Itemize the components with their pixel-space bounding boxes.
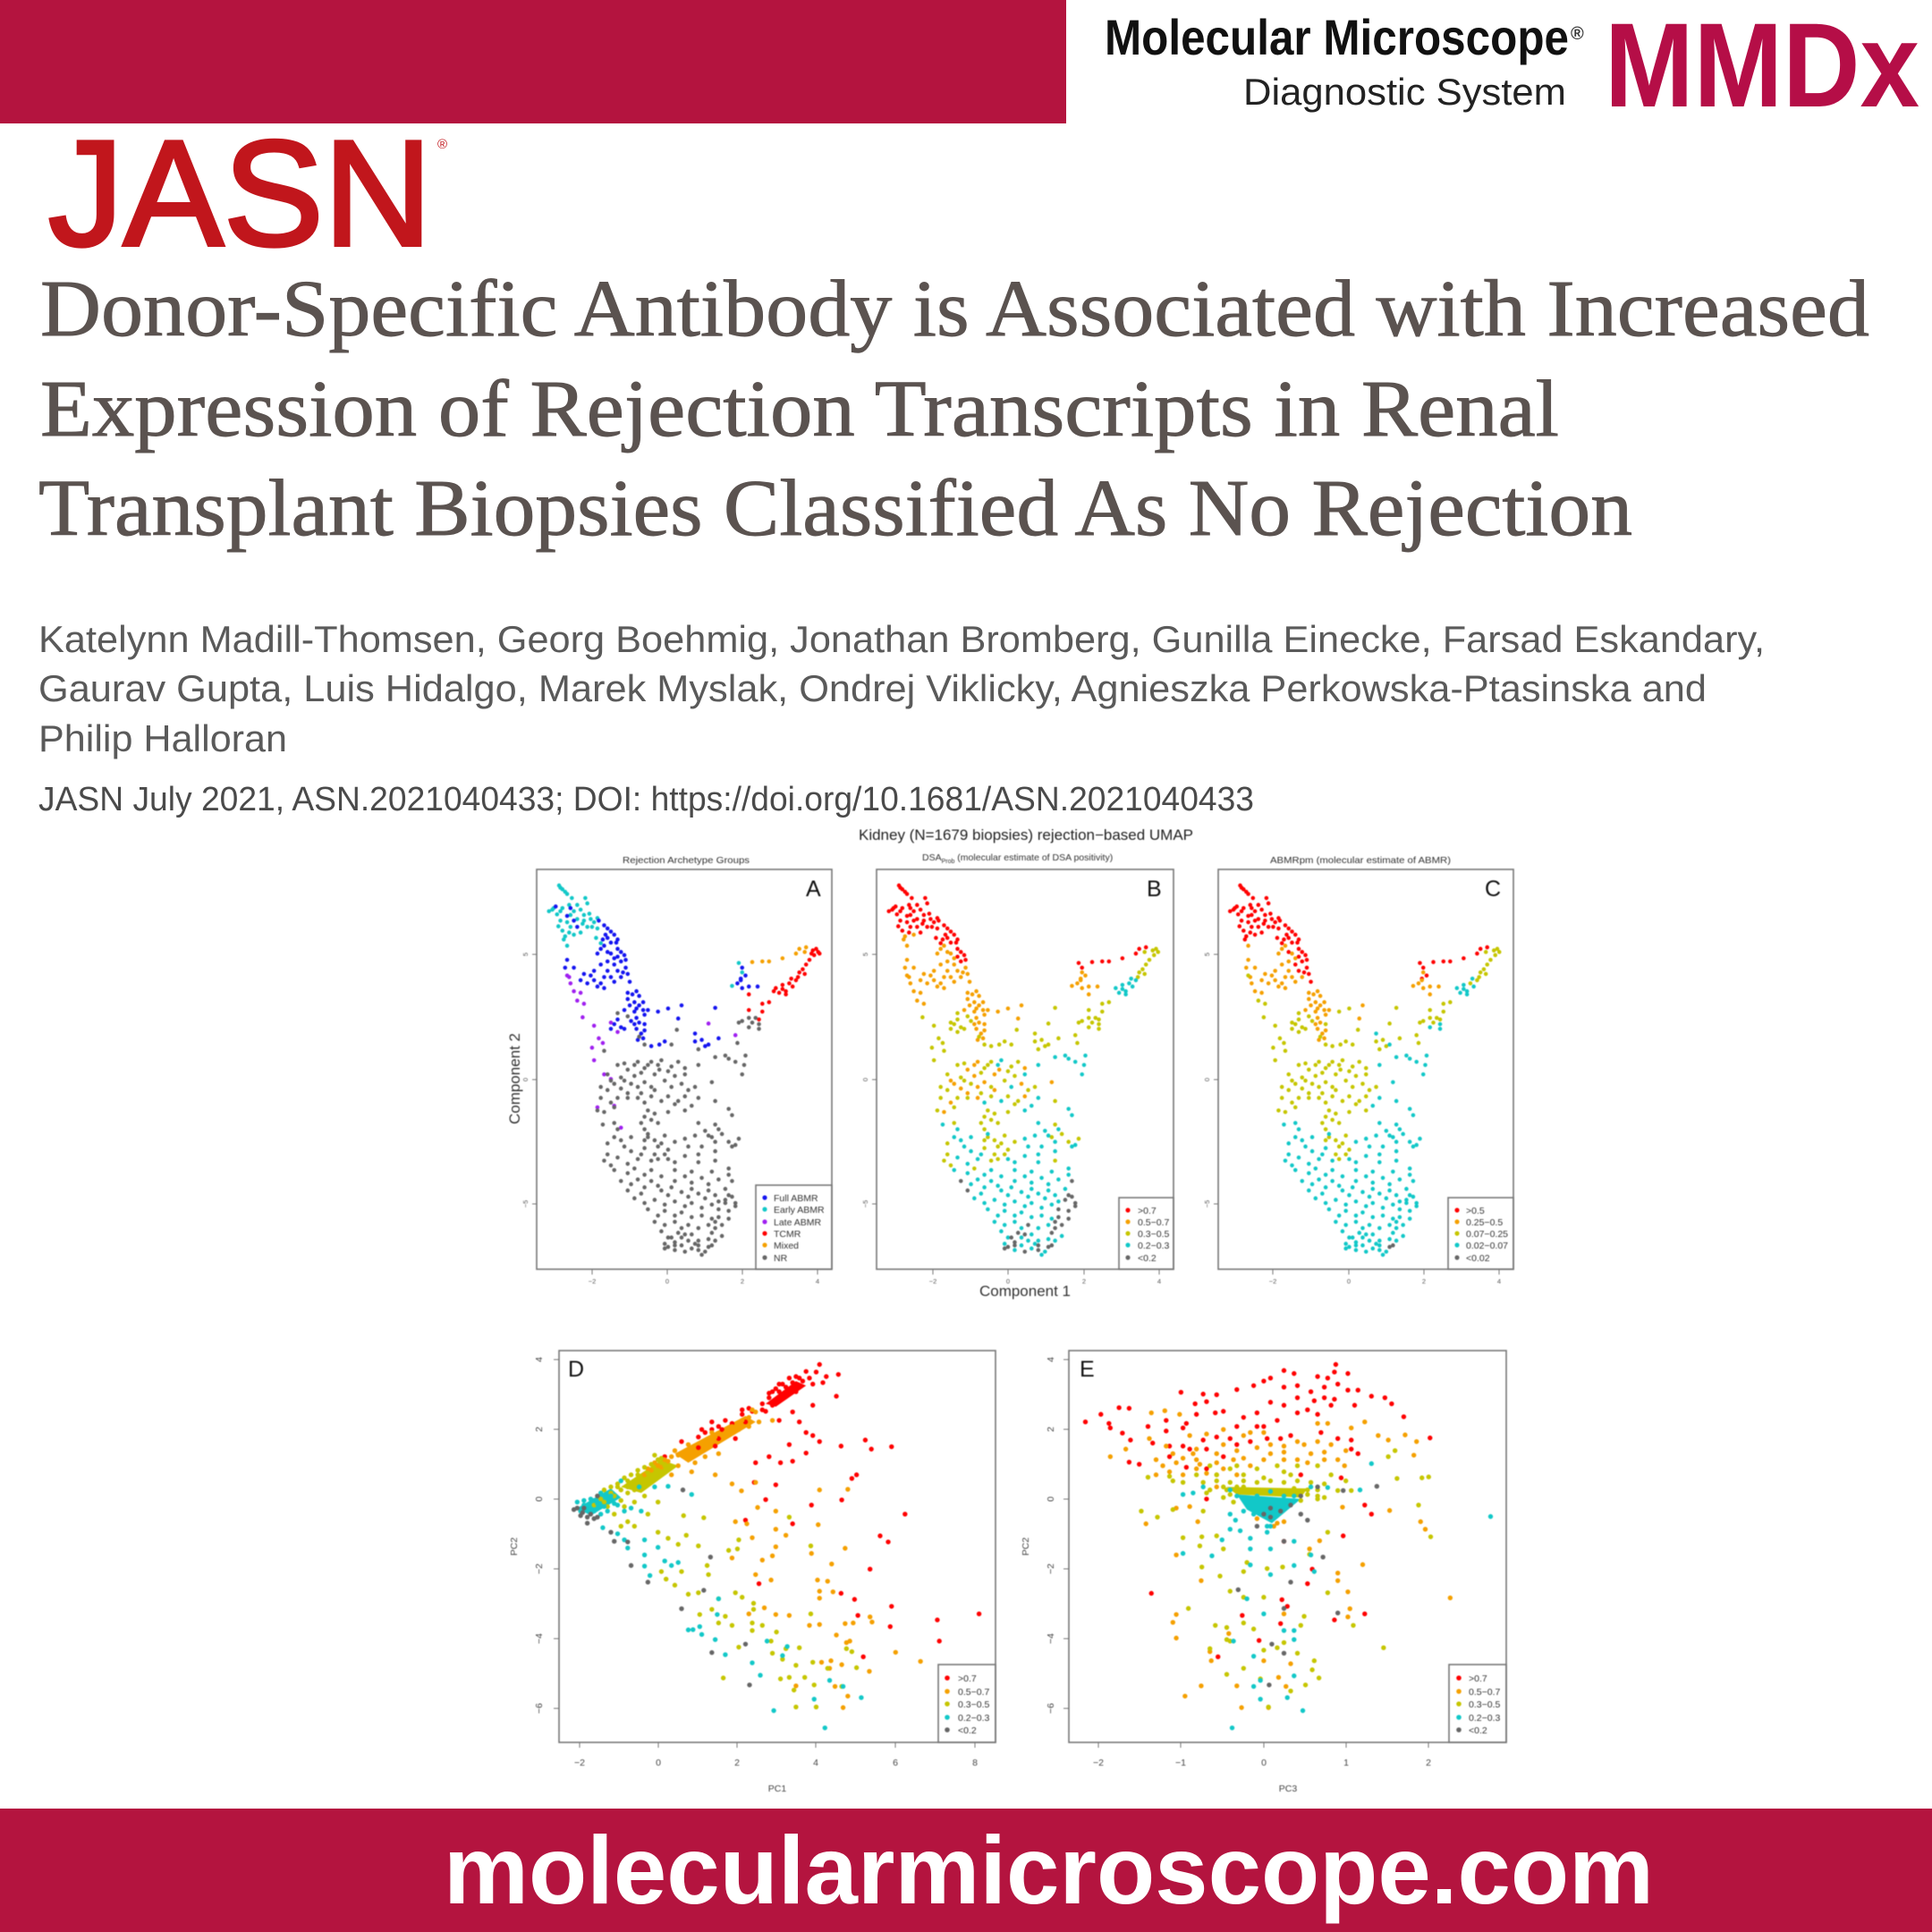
panel B: DSA prob: 4 [1157,1277,1161,1285]
panel A: rejection archetype groups: −5 [521,1200,530,1208]
panel E: PC3 vs PC2: 0 [1261,1758,1267,1768]
panel E: PC3 vs PC2: 1 [1343,1758,1349,1768]
panel D: PC1 vs PC2: 2 [534,1427,545,1432]
panel C heading: ABMRpm (molecular estimate of ABMR) [1270,855,1451,866]
panel A legend: TCMR [774,1229,801,1240]
logo: Molecular Microscope: Molecular Microscope [1105,9,1569,65]
panel E legend: <0.2 [1469,1725,1487,1736]
panel C: ABMRpm: 5 [1203,953,1211,956]
panel D: PC1 vs PC2 [509,1351,996,1794]
panel D letter: D [568,1357,584,1382]
website url: molecularmicroscope.com [444,1816,1654,1924]
panel A legend: NR [774,1253,788,1264]
title: Transplant Biopsies Classified As No Rejection [38,464,1632,553]
panel C: ABMRpm [1203,855,1513,1285]
panel C legend [1448,1198,1513,1269]
title: Donor-Specific Antibody is Associated with Increased [40,265,1869,353]
panel B: DSA prob [861,852,1174,1285]
panel D: PC1 vs PC2: 4 [813,1758,818,1768]
panel E: PC3 vs PC2 [1021,1351,1506,1794]
panel D legend: >0.7 [958,1674,977,1684]
panel B: DSA prob: −2 [929,1277,936,1285]
panel A legend: Late ABMR [774,1217,822,1228]
panel B legend: 0.2−0.3 [1138,1241,1169,1251]
panel B: DSA prob: 0 [1006,1277,1010,1285]
citation: JASN July 2021, ASN.2021040433; DOI: https://doi.org/10.1681/ASN.2021040433 [38,781,1254,818]
panel D: PC1 vs PC2: 8 [972,1758,978,1768]
panel C legend: <0.02 [1466,1253,1490,1264]
chart heading: Kidney (N=1679 biopsies) rejection−based UMAP [859,827,1193,843]
panel D: PC1 vs PC2: −6 [534,1703,545,1714]
panel E: PC3 vs PC2: 0 [1046,1496,1056,1502]
panel B: DSA prob: −5 [861,1200,869,1208]
panel B legend: 0.5−0.7 [1138,1217,1169,1228]
logo: JASN: JASN [48,109,432,277]
panel A: rejection archetype groups: 0 [665,1277,669,1285]
panel D: PC1 vs PC2: 2 [734,1758,740,1768]
panel A: rejection archetype groups: 5 [521,953,530,956]
panel C: ABMRpm: 4 [1497,1277,1501,1285]
panel E: PC3 vs PC2: −2 [1046,1563,1056,1574]
title [38,265,1869,553]
panel E legend [1449,1665,1506,1742]
panel A legend: Full ABMR [774,1193,818,1204]
panel A legend: Early ABMR [774,1205,825,1216]
panel C: ABMRpm: −2 [1269,1277,1276,1285]
panel C: ABMRpm: 0 [1347,1277,1351,1285]
panel C legend: 0.25−0.5 [1466,1217,1503,1228]
panel B: DSA prob: 0 [861,1078,869,1081]
panel E legend: 0.2−0.3 [1469,1713,1500,1724]
logo: Molecular Microscope: ® [1571,24,1584,44]
panel D: PC1 vs PC2: −4 [534,1633,545,1644]
authors: Katelynn Madill-Thomsen, Georg Boehmig, Jonathan Bromberg, Gunilla Einecke, Farsad Eskandary, [38,618,1765,660]
panel C: ABMRpm: −5 [1203,1200,1211,1208]
panel E: PC3 vs PC2: PC2 [1021,1538,1031,1555]
panel C scatter [1230,886,1499,1255]
panel C legend: 0.07−0.25 [1466,1229,1508,1240]
panel C: ABMRpm: 0 [1203,1078,1211,1081]
authors: Philip Halloran [38,717,287,759]
panel E: PC3 vs PC2: −4 [1046,1633,1056,1644]
panel B legend [1119,1198,1174,1269]
panel D: PC1 vs PC2: −2 [574,1758,585,1768]
panel B scatter [889,886,1158,1255]
panel E letter: E [1080,1357,1095,1382]
panel A: rejection archetype groups: 4 [816,1277,819,1285]
panel E legend: >0.7 [1469,1674,1487,1684]
authors: Gaurav Gupta, Luis Hidalgo, Marek Myslak, Ondrej Viklicky, Agnieszka Perkowska-Ptasinska and [38,667,1707,709]
axis label: Component 2: Component 2 [506,1033,523,1124]
panel E: PC3 vs PC2: 4 [1046,1357,1056,1362]
panel A legend: Mixed [774,1241,799,1251]
panel A scatter [549,886,819,1255]
panel A: rejection archetype groups [521,855,832,1285]
panel B letter: B [1147,877,1162,902]
panel B legend: >0.7 [1138,1206,1157,1216]
panel D: PC1 vs PC2: 4 [534,1357,545,1362]
logo: Molecular Microscope [1105,9,1584,113]
panel B legend: <0.2 [1138,1253,1157,1264]
panel D legend: 0.3−0.5 [958,1699,989,1710]
panel D: PC1 vs PC2: PC2 [509,1538,520,1555]
panel E legend: 0.3−0.5 [1469,1699,1500,1710]
authors [38,618,1765,759]
panel C legend: 0.02−0.07 [1466,1241,1508,1251]
panel E scatter [1085,1364,1490,1728]
panel D: PC1 vs PC2: PC1 [768,1784,786,1794]
panel D: PC1 vs PC2: −2 [534,1563,545,1574]
panel B: DSA prob: 5 [861,953,869,956]
panel C: ABMRpm: 2 [1422,1277,1426,1285]
logo: Molecular Microscope: Diagnostic System [1243,71,1566,113]
panel C letter: C [1485,877,1501,902]
panel D legend [938,1665,996,1742]
panel D: PC1 vs PC2: 0 [656,1758,661,1768]
panel E: PC3 vs PC2: 2 [1046,1427,1056,1432]
axis label: Component 1: Component 1 [979,1283,1071,1300]
panel B heading: Prob [942,859,954,865]
panel E: PC3 vs PC2: −1 [1175,1758,1186,1768]
panel A letter: A [806,877,821,902]
panel D: PC1 vs PC2: 6 [893,1758,898,1768]
panel E: PC3 vs PC2: PC3 [1279,1784,1297,1794]
panel B: DSA prob: 2 [1082,1277,1086,1285]
title: Expression of Rejection Transcripts in Renal [40,365,1559,453]
panel D legend: 0.5−0.7 [958,1687,989,1698]
panel A: rejection archetype groups: −2 [589,1277,596,1285]
panel E: PC3 vs PC2: 2 [1426,1758,1431,1768]
bottom banner [0,1809,1932,1932]
top banner [0,0,1066,123]
panel A heading: Rejection Archetype Groups [623,855,750,866]
panel E: PC3 vs PC2: −2 [1093,1758,1104,1768]
logo: JASN: ® [437,137,447,152]
panel E: PC3 vs PC2: −6 [1046,1703,1056,1714]
panel B heading: (molecular estimate of DSA positivity) [954,852,1113,863]
panel C legend: >0.5 [1466,1206,1485,1216]
panel D scatter [574,1364,979,1728]
panel D legend: <0.2 [958,1725,977,1736]
panel A: rejection archetype groups: 0 [521,1078,530,1081]
panel E legend: 0.5−0.7 [1469,1687,1500,1698]
panel D: PC1 vs PC2: 0 [534,1496,545,1502]
panel B heading: DSA [922,852,942,863]
panel A: rejection archetype groups: 2 [741,1277,744,1285]
panel B legend: 0.3−0.5 [1138,1229,1169,1240]
panel D legend: 0.2−0.3 [958,1713,989,1724]
panel A legend [756,1185,832,1269]
